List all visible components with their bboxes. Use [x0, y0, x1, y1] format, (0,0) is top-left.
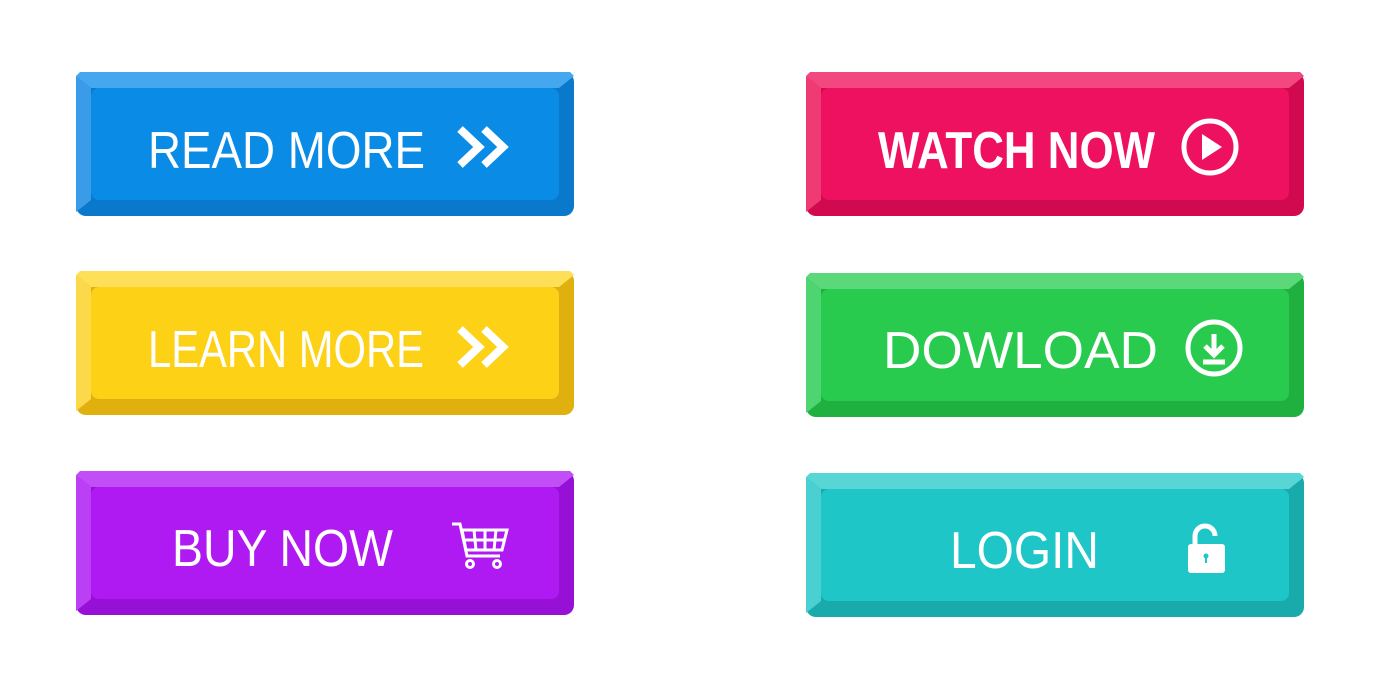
button: buy now — [76, 471, 574, 615]
label: buy now: BUY NOW — [172, 520, 393, 578]
button: login — [806, 473, 1304, 617]
icon: cart — [452, 524, 507, 568]
label: watch now: WATCH NOW — [878, 122, 1156, 180]
icon: download — [1188, 322, 1240, 374]
button: watch now — [806, 72, 1304, 216]
button: read more — [76, 72, 574, 216]
icon: play — [1184, 121, 1236, 173]
label: dowload: DOWLOAD — [883, 322, 1158, 380]
icon: double chevron — [460, 329, 503, 365]
icon: unlocked padlock — [1188, 526, 1225, 573]
label: learn more: LEARN MORE — [148, 321, 424, 379]
button: download — [806, 273, 1304, 417]
label: login: LOGIN — [950, 522, 1099, 580]
button: learn more — [76, 271, 574, 415]
icon: double chevron — [460, 129, 503, 165]
label: read more: READ MORE — [148, 122, 425, 180]
